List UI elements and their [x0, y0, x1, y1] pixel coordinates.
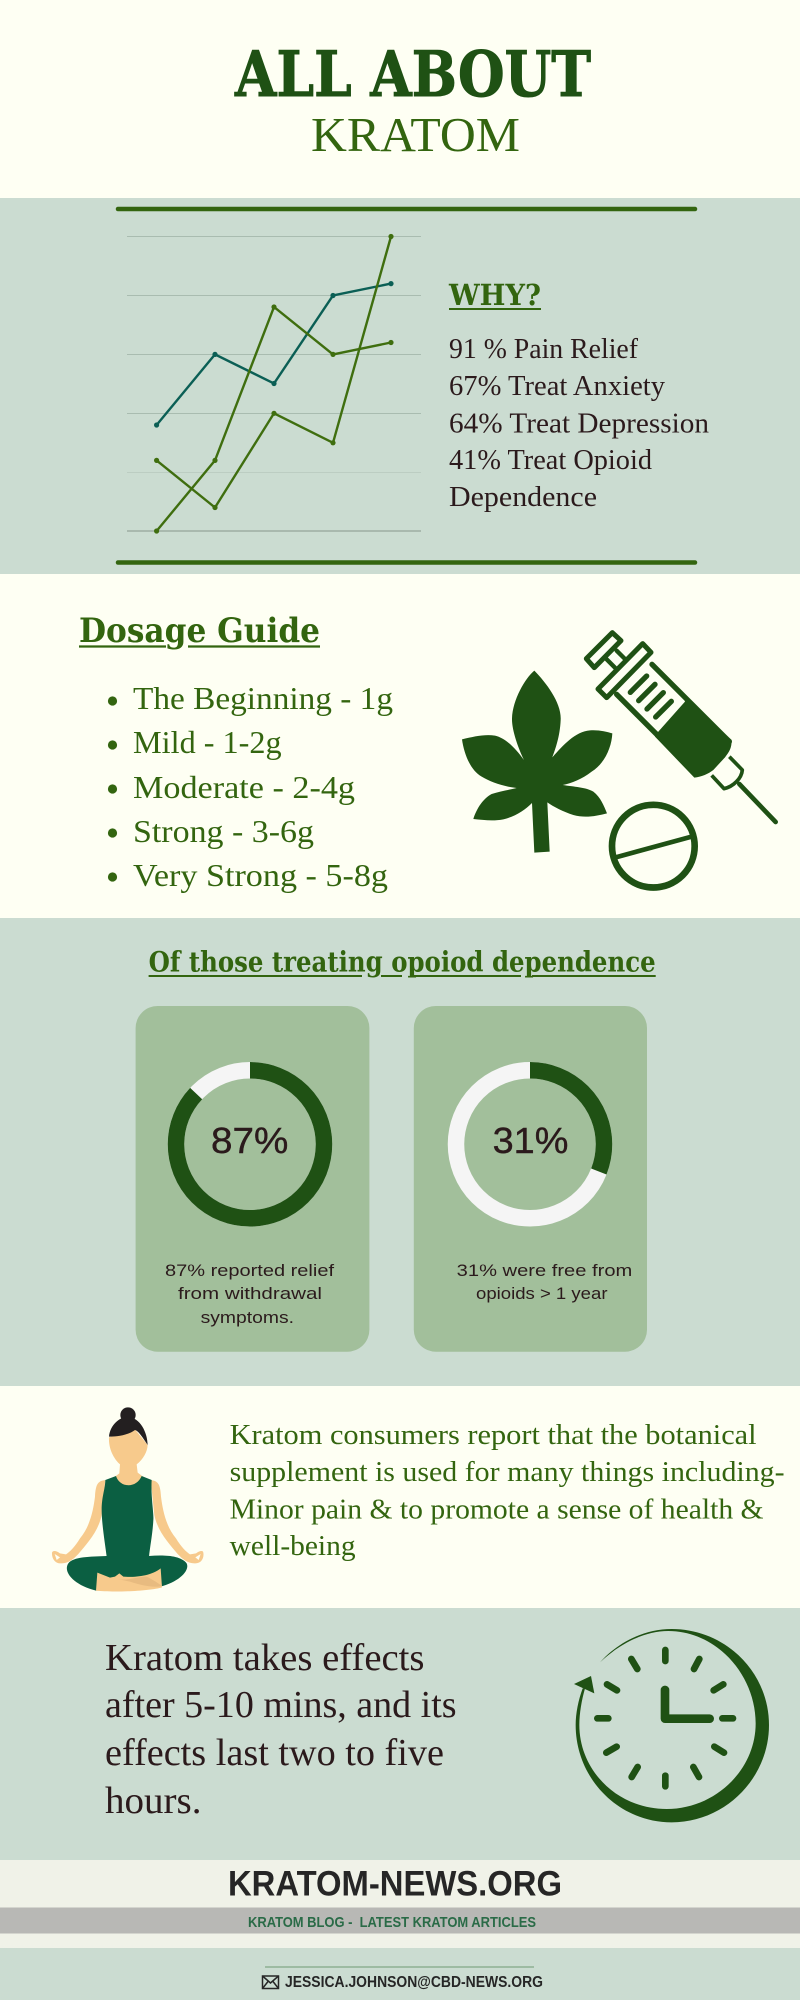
text block: why list: 41% Treat Opioid: [449, 445, 652, 476]
text block: why list: Dependence: [449, 482, 597, 513]
caption: 31 percent: [457, 1261, 632, 1303]
subtitle: kratom: KRATOM: [311, 107, 520, 162]
panel: opioid dependence: [0, 918, 800, 1386]
text block: consumer uses: supplement is used for many things including-: [230, 1457, 785, 1488]
icon: meditating woman: [52, 1407, 204, 1592]
website name: KRATOM-NEWS.ORG: [228, 1865, 562, 1904]
panel: contact: [0, 1948, 800, 2000]
caption: 31 percent: opioids > 1 year: [476, 1284, 608, 1303]
icon: leaf: [462, 671, 612, 853]
panel: consumers: [52, 1407, 785, 1592]
text block: why list: 91 % Pain Relief: [449, 334, 639, 365]
heading: opioid dependence: Of those treating opoiod dependence: [149, 946, 656, 979]
heading: dosage guide: Dosage Guide: [79, 611, 320, 651]
line chart: [127, 234, 421, 534]
text block: consumer uses: Minor pain & to promote a sense of health &: [230, 1494, 764, 1525]
text block: dosage list: [108, 680, 393, 893]
text block: dosage list: Moderate - 2-4g: [133, 769, 355, 805]
text block: effects timing: hours.: [105, 1780, 202, 1822]
icon: envelope: [262, 1976, 278, 1988]
card: 31 percent: [414, 1006, 647, 1352]
value: 87 percent: 87%: [211, 1120, 288, 1161]
caption: 87 percent: 87% reported relief: [165, 1261, 334, 1280]
title: all about: ALL ABOUT: [234, 37, 591, 111]
text block: why list: 64% Treat Depression: [449, 408, 709, 440]
text block: effects timing: after 5-10 mins, and its: [105, 1684, 457, 1726]
text block: consumer uses: [230, 1420, 785, 1562]
text block: dosage list: Mild - 1-2g: [133, 724, 282, 760]
panel: header: [234, 37, 591, 162]
text block: consumer uses: Kratom consumers report that the botanical: [230, 1420, 757, 1451]
donut chart: 31 percent: [456, 1070, 604, 1218]
caption: 87 percent: symptoms.: [201, 1308, 294, 1327]
caption: 87 percent: from withdrawal: [178, 1284, 322, 1303]
donut chart: 87 percent: [176, 1070, 324, 1218]
caption: 31 percent: 31% were free from: [457, 1261, 632, 1280]
text block: effects timing: effects last two to five: [105, 1732, 444, 1774]
panel: effects timing: [0, 1608, 800, 1860]
card: 87 percent: [136, 1006, 369, 1352]
icon: clock: [574, 1629, 769, 1822]
caption: 87 percent: [165, 1261, 334, 1327]
text block: dosage list: Very Strong - 5-8g: [133, 857, 388, 893]
text block: dosage list: Strong - 3-6g: [133, 813, 314, 849]
email address: JESSICA.JOHNSON@CBD-NEWS.ORG: [285, 1974, 543, 1991]
panel: footer banner: [0, 1860, 800, 1948]
text block: why list: 67% Treat Anxiety: [449, 371, 665, 402]
panel: dosage guide: [79, 611, 776, 893]
text block: why list: [449, 334, 709, 513]
heading: why: WHY?: [448, 278, 541, 312]
text block: effects timing: Kratom takes effects: [105, 1637, 424, 1679]
value: 31 percent: 31%: [493, 1120, 568, 1161]
panel: why section: [0, 198, 800, 574]
blog tagline: KRATOM BLOG - LATEST KRATOM ARTICLES: [248, 1914, 536, 1931]
icon: pill: [612, 805, 695, 887]
text block: dosage list: The Beginning - 1g: [133, 680, 393, 716]
text block: consumer uses: well-being: [230, 1531, 356, 1562]
icon: syringe: [586, 633, 776, 822]
text block: effects timing: [105, 1637, 457, 1822]
